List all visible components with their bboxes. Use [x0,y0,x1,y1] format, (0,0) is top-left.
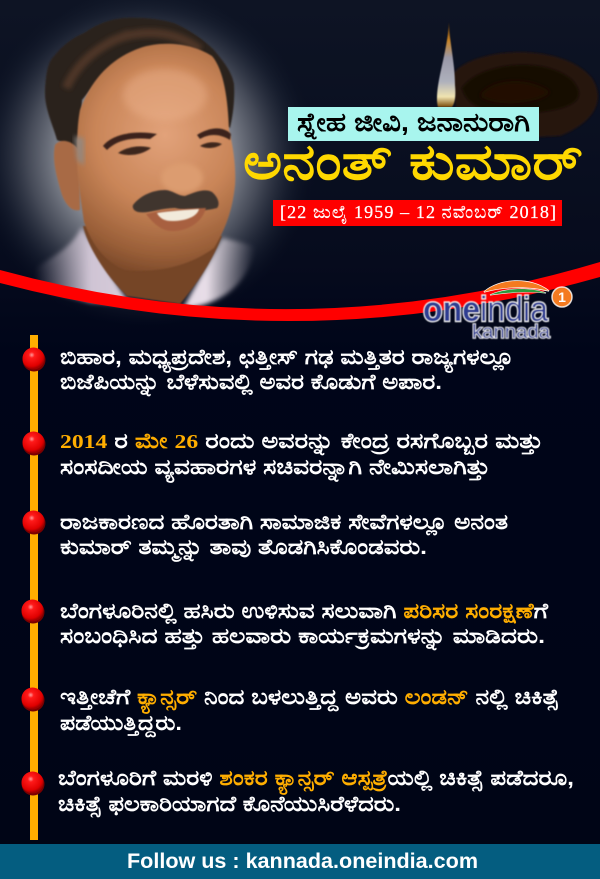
hair highlight [66,33,200,88]
text: ಸಂಸದೀಯ ವ್ಯವಹಾರಗಳ ಸಚಿವರನ್ನಾಗಿ ನೇಮಿಸಲಾಗಿತ್ತು [60,455,490,484]
bullet [22,432,46,456]
eyes [118,146,151,155]
text: ಬೆಂಗಳೂರಿನಲ್ಲಿ ಹಸಿರು ಉಳಿಸುವ ಸಲುವಾಗಿ ಪರಿಸರ ಸಂರಕ್ಷಣೆ ಗೆ [60,599,546,623]
text: ಬಿಜೆಪಿಯನ್ನು ಬೆಳೆಸುವಲ್ಲಿ ಅವರ ಕೊಡುಗೆ ಅಪಾರ. [60,370,442,398]
nose [161,163,203,193]
teeth [157,209,199,221]
smile [146,208,206,231]
bullet [22,348,46,372]
face [77,44,235,271]
text: ಇತ್ತೀಚೆಗೆ ಕ್ಯಾನ್ಸರ್ ನಿಂದ ಬಳಲುತ್ತಿದ್ದ ಅವರು ಲಂಡನ್ ನಲ್ಲಿ ಚಿಕಿತ್ಸೆ [60,685,548,709]
badge: 1 [558,289,566,305]
item 1 [22,345,514,398]
footer: Follow us : kannada.oneindia.com [127,850,478,873]
item 6 [22,766,574,818]
subword: kannada [472,322,550,343]
ear [54,141,80,210]
portrait [36,18,256,310]
date box: [22 ಜುಲೈ 1959 – 12 ನವೆಂಬರ್ 2018] [280,202,556,224]
subtitle box: ಸ್ನೇಹ ಜೀವಿ, ಜನಾನುರಾಗಿ [297,107,530,140]
sideburn [74,136,84,166]
text: ರಾಜಕಾರಣದ ಹೊರತಾಗಿ ಸಾಮಾಜಿಕ ಸೇವೆಗಳಲ್ಲೂ ಅನಂತ [60,510,509,537]
item 4 [22,599,549,652]
text: ಚಿಕಿತ್ಸೆ ಫಲಕಾರಿಯಾಗದೆ ಕೊನೆಯುಸಿರೆಳೆದರು. [58,792,401,818]
badge [552,287,572,307]
text: 2014 ರ ಮೇ 26 ರಂದು ಅವರನ್ನು ಕೇಂದ್ರ ರಸಗೊಬ್ಬರ ಮತ್ತು [60,429,490,453]
eyebrows [103,132,157,150]
portrait glow [0,0,317,327]
timeline bar [30,335,38,840]
tricolour swoosh [484,281,549,295]
forehead highlight [123,69,207,121]
bullet [22,510,46,534]
text: ಕುಮಾರ್ ತಮ್ಮನ್ನು ತಾವು ತೊಡಗಿಸಿಕೊಂಡವರು. [60,535,427,563]
hair [45,18,234,150]
shirt [36,227,256,310]
neck [83,225,222,304]
title: ಅನಂತ್ ಕುಮಾರ್ [243,134,583,190]
text: ಪಡೆಯುತ್ತಿದ್ದರು. [60,711,182,739]
item 3 [22,510,509,563]
bullet [22,600,44,624]
item 2 [22,429,543,484]
icon: oil lamp [437,22,598,140]
mustache [133,190,219,212]
text: ಬೆಂಗಳೂರಿಗೆ ಮರಳಿ ಶಂಕರ ಕ್ಯಾನ್ಸರ್ ಆಸ್ಪತ್ರೆ ಯಲ್ಲಿ ಚಿಕಿತ್ಸೆ ಪಡೆದರೂ, [58,766,551,790]
bullet [22,772,44,796]
text: ಸಂಬಂಧಿಸಿದ ಹತ್ತು ಹಲವಾರು ಕಾರ್ಯಕ್ರಮಗಳನ್ನು ಮಾಡಿದರು. [60,624,545,652]
bullet [22,688,44,712]
item 5 [22,685,559,739]
red swoosh [0,262,600,321]
wordmark: oneindia [423,290,548,329]
text: ಬಿಹಾರ, ಮಧ್ಯಪ್ರದೇಶ, ಛತ್ತೀಸ್ ಗಢ ಮತ್ತಿತರ ರಾಜ್ಯಗಳಲ್ಲೂ [60,345,514,374]
footer [0,844,600,879]
logo: oneindia kannada [423,281,572,343]
